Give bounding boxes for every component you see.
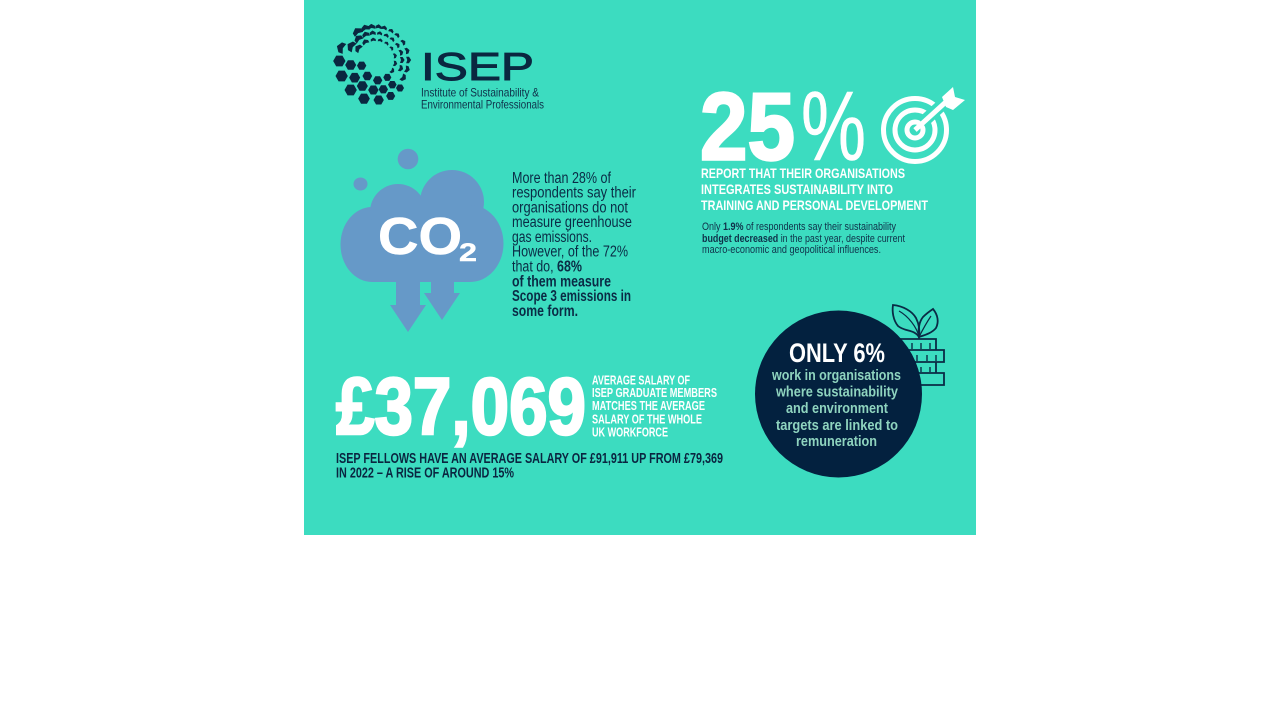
text block: sustainability budget: macro-economic and geopolitical influences. <box>702 244 881 256</box>
icon: plant growing from coin stack <box>893 305 944 385</box>
text block: greenhouse gas measurement: respondents say their <box>512 185 636 202</box>
CO2 label: CO <box>378 208 462 266</box>
logo subtitle: Environmental Professionals <box>421 98 544 112</box>
logo: ISEP <box>333 23 544 112</box>
text block: sustainability budget: budget decreased in the past year, despite current <box>702 233 905 245</box>
icon: target with arrow <box>884 87 965 162</box>
text block: fellows salary: ISEP FELLOWS HAVE AN AVERAGE SALARY OF £91,911 UP FROM £79,369 <box>336 451 723 467</box>
icon: logo ring of hexagons and chevrons <box>333 23 411 104</box>
text block: sustainability budget <box>702 221 905 256</box>
text block: greenhouse gas measurement: measure greenhouse <box>512 214 632 231</box>
text block: graduate salary description: ISEP GRADUATE MEMBERS <box>592 386 717 400</box>
text block: graduate salary description: AVERAGE SALARY OF <box>592 374 690 388</box>
text block: greenhouse gas measurement <box>512 170 636 320</box>
text block: fellows salary: IN 2022 – A RISE OF AROUND 15% <box>336 466 514 482</box>
text block: greenhouse gas measurement: gas emissions. <box>512 229 592 246</box>
text block: graduate salary description: MATCHES THE AVERAGE <box>592 399 705 413</box>
heading: training and development: INTEGRATES SUSTAINABILITY INTO <box>701 181 893 197</box>
text block: greenhouse gas measurement: However, of the 72% <box>512 244 628 261</box>
logo subtitle <box>421 86 544 112</box>
callout: only 6% <box>755 310 922 478</box>
text block: greenhouse gas measurement: of them measure <box>512 274 611 290</box>
icon: CO2 cloud with down arrows <box>340 149 504 332</box>
callout text: and environment <box>786 400 888 417</box>
CO2 label: 2 <box>459 239 477 267</box>
heading: training and development <box>701 165 928 213</box>
text block: graduate salary description <box>592 374 717 440</box>
text block: greenhouse gas measurement: More than 28% of <box>512 170 612 187</box>
callout text: work in organisations <box>771 367 901 384</box>
text block: fellows salary <box>336 451 723 482</box>
statistic: average salary: £37,069 <box>336 362 586 452</box>
heading: training and development: TRAINING AND PERSONAL DEVELOPMENT <box>701 197 928 213</box>
callout text: remuneration <box>796 433 877 450</box>
text block: greenhouse gas measurement: Scope 3 emissions in <box>512 288 631 305</box>
panel: teal background <box>304 0 976 535</box>
text block: sustainability budget: Only 1.9% of respondents say their sustainability <box>702 221 896 233</box>
statistic: 25% <box>700 71 866 181</box>
logo wordmark: ISEP <box>421 46 534 89</box>
text block: greenhouse gas measurement: some form. <box>512 303 578 320</box>
callout text <box>771 367 901 450</box>
text block: graduate salary description: UK WORKFORCE <box>592 426 668 440</box>
text block: greenhouse gas measurement: organisations do not <box>512 200 629 216</box>
logo subtitle: Institute of Sustainability & <box>421 86 539 100</box>
heading: training and development: REPORT THAT THEIR ORGANISATIONS <box>701 165 905 181</box>
text block: greenhouse gas measurement: that do, 68% <box>512 258 582 276</box>
statistic: 25%: % <box>801 71 866 181</box>
callout heading: ONLY 6% <box>789 338 885 368</box>
callout text: where sustainability <box>775 384 899 400</box>
statistic: 25%: 25 <box>700 74 795 180</box>
text block: graduate salary description: SALARY OF THE WHOLE <box>592 412 702 426</box>
callout text: targets are linked to <box>776 417 898 434</box>
